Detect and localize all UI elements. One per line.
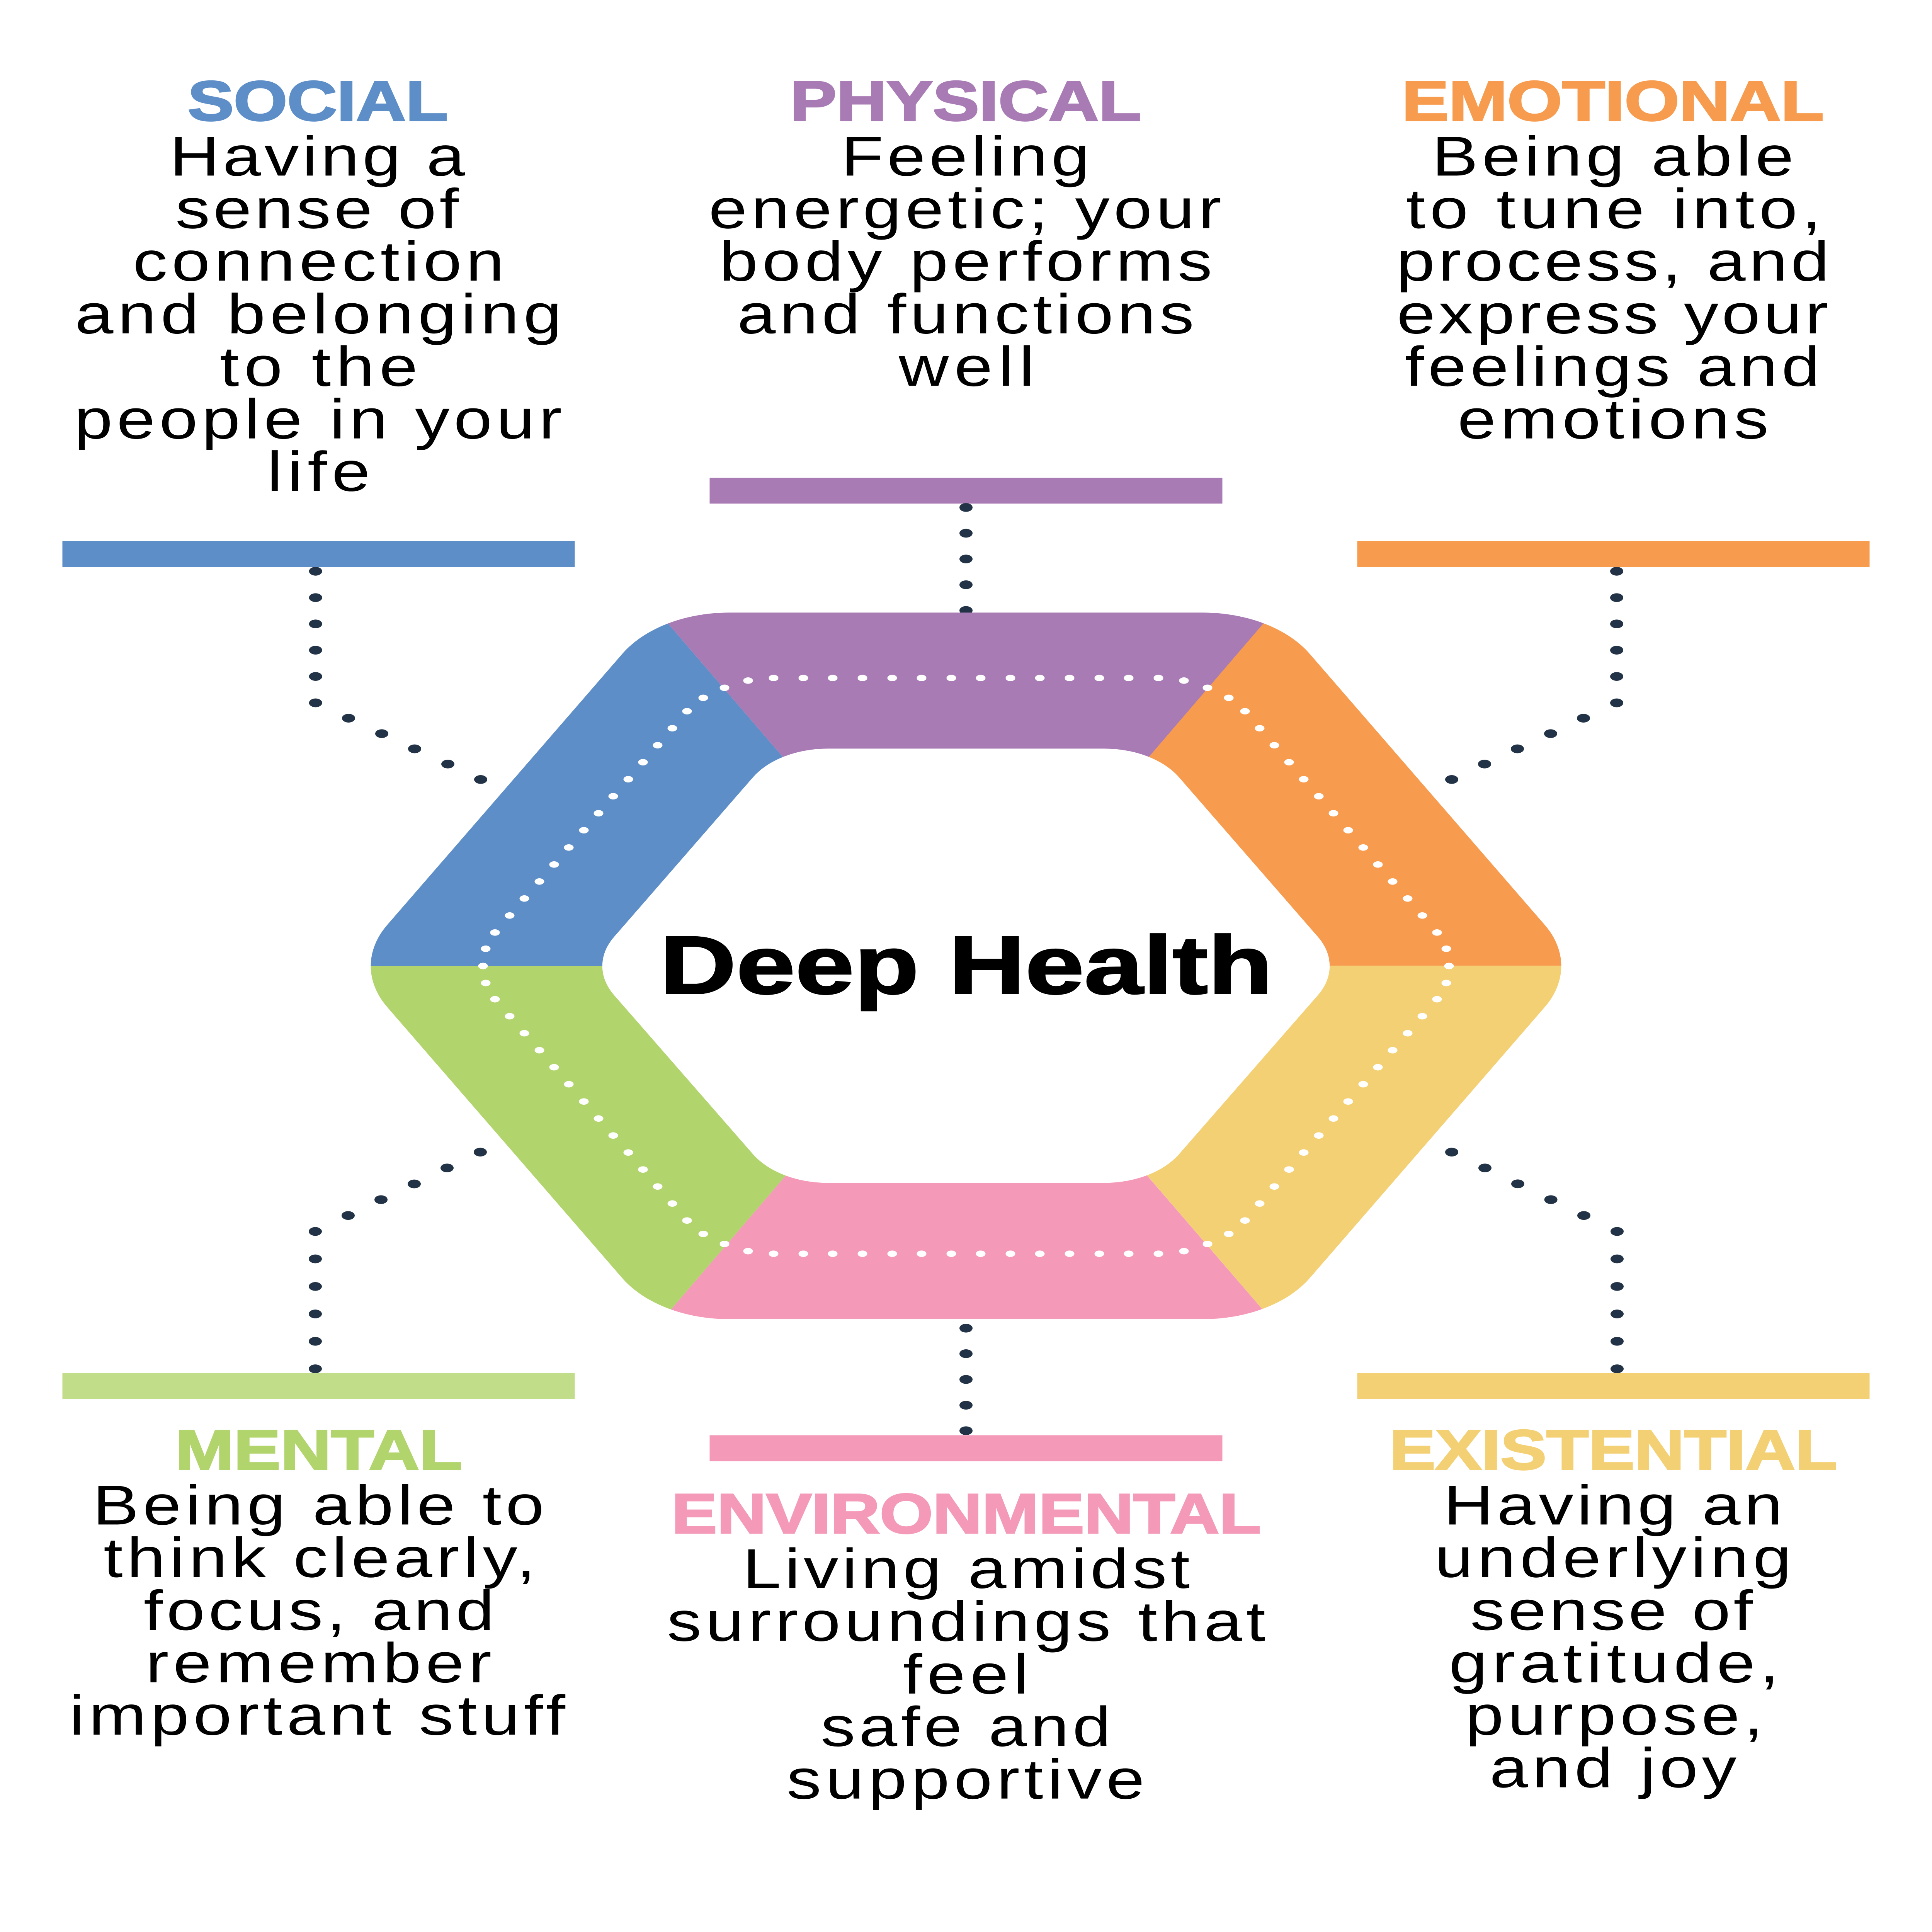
text block: mental description bbox=[69, 1474, 566, 1747]
ring segment: physical (purple) bbox=[371, 612, 1561, 1319]
text block: mental description: Being able to bbox=[93, 1474, 544, 1537]
colour bar: environmental bbox=[709, 1435, 1223, 1461]
heading: social: SOCIAL bbox=[188, 70, 448, 133]
text block: physical description: Feeling bbox=[841, 125, 1090, 188]
center title: Deep Health bbox=[660, 919, 1273, 1012]
panel: environmental bbox=[667, 1328, 1265, 1811]
text block: social description: to the bbox=[220, 335, 418, 398]
dotted connector: mental bbox=[315, 1152, 480, 1369]
text block: social description: connection bbox=[133, 230, 504, 293]
text block: environmental description bbox=[667, 1537, 1265, 1811]
text block: physical description: well bbox=[898, 335, 1034, 398]
heading: physical: PHYSICAL bbox=[790, 70, 1141, 133]
text block: existential description: Having an bbox=[1444, 1474, 1782, 1537]
text block: emotional description: express your bbox=[1397, 283, 1828, 345]
text block: social description: people in your bbox=[74, 388, 562, 451]
text block: social description: life bbox=[267, 440, 370, 503]
dotted connector: emotional bbox=[1452, 571, 1617, 779]
colour bar: physical bbox=[709, 478, 1223, 503]
ring segment: mental (green) bbox=[371, 966, 786, 1310]
dotted connector: social bbox=[316, 571, 481, 779]
text block: environmental description: feel bbox=[903, 1643, 1029, 1706]
text block: emotional description: Being able bbox=[1432, 125, 1794, 188]
heading: mental: MENTAL bbox=[175, 1418, 462, 1481]
ring segment: environmental (pink) bbox=[371, 612, 1561, 1319]
text block: environmental description: surroundings that bbox=[667, 1590, 1265, 1653]
panel: mental bbox=[63, 1152, 575, 1747]
text block: environmental description: Living amidst bbox=[743, 1537, 1190, 1600]
panel: existential bbox=[1357, 1152, 1869, 1799]
text block: physical description: body performs bbox=[719, 230, 1212, 293]
white dotted inner hexagon bbox=[483, 678, 1449, 1254]
text block: environmental description: safe and bbox=[821, 1696, 1111, 1758]
text block: social description: Having a bbox=[170, 125, 465, 188]
panel: emotional bbox=[1357, 70, 1869, 779]
colour bar: existential bbox=[1357, 1373, 1869, 1399]
text block: existential description: gratitude, bbox=[1449, 1632, 1779, 1694]
text block: mental description: focus, and bbox=[144, 1579, 494, 1642]
text block: emotional description: process, and bbox=[1396, 230, 1829, 293]
text block: emotional description: emotions bbox=[1458, 388, 1769, 451]
ring segment: existential (yellow) bbox=[1147, 966, 1561, 1309]
heading: emotional: EMOTIONAL bbox=[1402, 70, 1824, 133]
text block: existential description: sense of bbox=[1470, 1579, 1753, 1642]
text block: physical description: and functions bbox=[737, 283, 1194, 345]
colour bar: social bbox=[63, 541, 575, 567]
dotted connector: physical bbox=[959, 507, 973, 611]
panel: physical bbox=[709, 70, 1223, 611]
panel: social bbox=[63, 70, 575, 779]
text block: social description: and belonging bbox=[75, 283, 562, 345]
text block: social description: sense of bbox=[175, 177, 459, 240]
hexagon ring diagram bbox=[371, 612, 1561, 1319]
heading: existential: EXISTENTIAL bbox=[1389, 1418, 1837, 1481]
text block: physical description: energetic; your bbox=[709, 177, 1221, 240]
ring segment: emotional (orange) bbox=[1148, 623, 1561, 966]
text block: emotional description: feelings and bbox=[1405, 335, 1820, 398]
colour bar: emotional bbox=[1357, 541, 1869, 567]
text block: existential description: and joy bbox=[1490, 1736, 1737, 1799]
ring segment: social (blue) bbox=[371, 624, 783, 966]
dotted connector: existential bbox=[1452, 1152, 1617, 1369]
text block: mental description: remember bbox=[146, 1632, 492, 1694]
dotted connector: environmental bbox=[959, 1328, 973, 1431]
text block: existential description: underlying bbox=[1435, 1526, 1791, 1589]
text block: existential description bbox=[1435, 1474, 1791, 1799]
text block: mental description: important stuff bbox=[69, 1684, 566, 1747]
text block: emotional description bbox=[1396, 125, 1829, 451]
text block: environmental description: supportive bbox=[787, 1748, 1145, 1811]
colour bar: mental bbox=[63, 1373, 575, 1399]
text block: physical description bbox=[709, 125, 1221, 398]
text block: existential description: purpose, bbox=[1465, 1684, 1763, 1747]
text block: social description bbox=[74, 125, 562, 503]
text block: mental description: think clearly, bbox=[104, 1526, 536, 1589]
text block: emotional description: to tune into, bbox=[1406, 177, 1821, 240]
heading: environmental: ENVIRONMENTAL bbox=[672, 1482, 1261, 1545]
